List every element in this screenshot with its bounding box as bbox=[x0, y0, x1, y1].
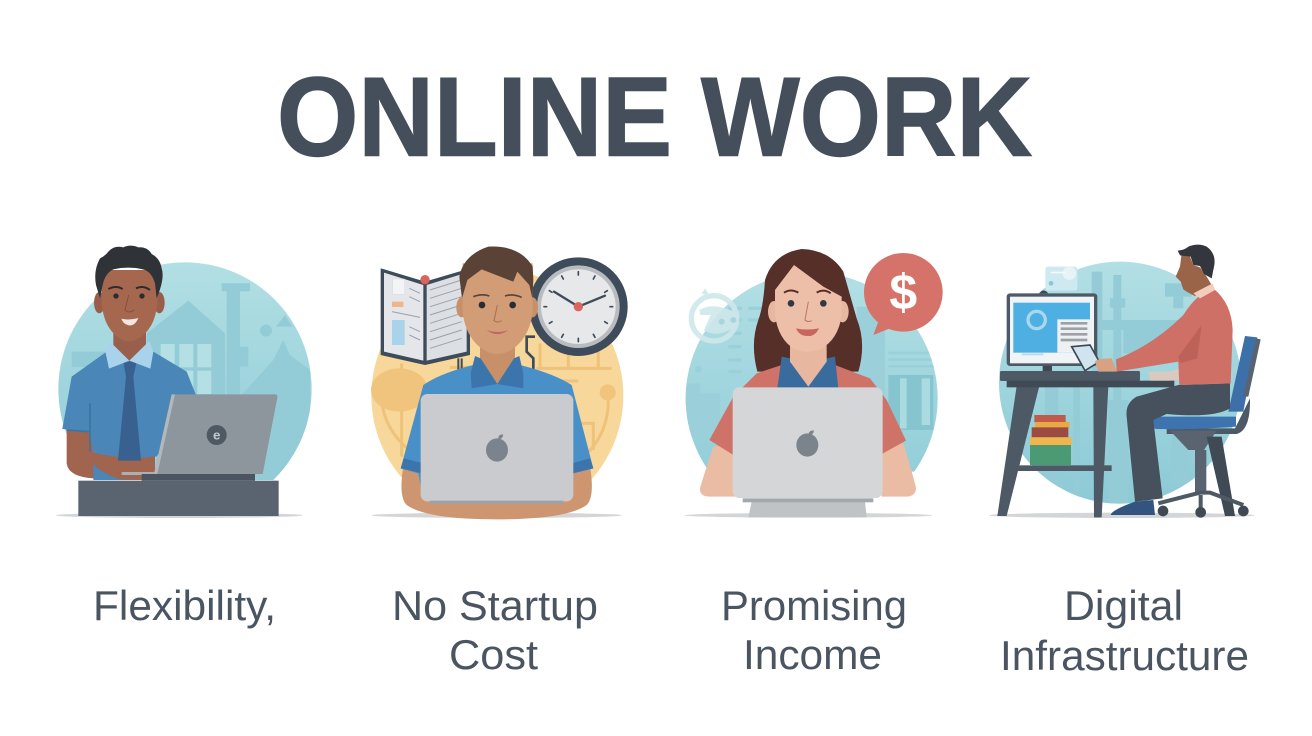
wall clock bbox=[527, 257, 628, 370]
laptop with apple logo bbox=[733, 387, 883, 517]
label: digital infrastructure: Infrastructure bbox=[1000, 632, 1249, 679]
label: flexibility: Flexibility, bbox=[93, 582, 276, 629]
webcam badge bbox=[1045, 267, 1077, 291]
laptop with logo: e bbox=[213, 428, 220, 443]
desk bbox=[78, 481, 279, 516]
background circle with city bbox=[686, 276, 938, 472]
ground shadow bbox=[56, 513, 303, 518]
title: ONLINE WORK bbox=[277, 54, 1032, 180]
label: no startup cost: Cost bbox=[449, 631, 538, 678]
open book with pin bbox=[381, 268, 470, 370]
background circle with circuit lines bbox=[371, 275, 624, 480]
stack of books bbox=[1030, 415, 1072, 465]
ground shadow bbox=[684, 513, 932, 518]
label: no startup cost: No Startup bbox=[392, 582, 598, 629]
person in blue polo bbox=[401, 247, 593, 519]
person with shirt and tie bbox=[62, 246, 196, 480]
label: digital infrastructure bbox=[1000, 582, 1249, 679]
speech bubble with dollar: $ bbox=[889, 264, 917, 320]
panel: flexibility illustration bbox=[56, 246, 312, 518]
infographic canvas bbox=[56, 76, 1261, 670]
background circle with towers bbox=[999, 262, 1241, 504]
laptop with apple logo bbox=[421, 394, 573, 504]
speech bubble with dollar bbox=[864, 253, 943, 335]
panel: promising income illustration bbox=[684, 249, 943, 524]
label: no startup cost bbox=[392, 582, 598, 678]
desk with shelf bbox=[997, 371, 1174, 517]
tablet bbox=[1072, 345, 1099, 371]
seated man in red sweater bbox=[1095, 245, 1233, 515]
label: promising income: Income bbox=[743, 631, 882, 678]
office chair bbox=[1151, 336, 1261, 518]
laptop with logo bbox=[122, 394, 277, 481]
woman with long hair bbox=[700, 249, 916, 497]
label: digital infrastructure: Digital bbox=[1064, 582, 1183, 629]
ground shadow bbox=[372, 513, 622, 518]
ground shadow bbox=[989, 513, 1254, 518]
panel: no startup cost illustration bbox=[371, 247, 628, 522]
panel: digital infrastructure illustration bbox=[989, 245, 1261, 518]
globe icon bbox=[691, 288, 738, 341]
label: promising income: Promising bbox=[721, 582, 907, 629]
label: promising income bbox=[721, 582, 907, 678]
background circle with house bbox=[58, 262, 312, 480]
desktop monitor bbox=[1007, 290, 1097, 371]
